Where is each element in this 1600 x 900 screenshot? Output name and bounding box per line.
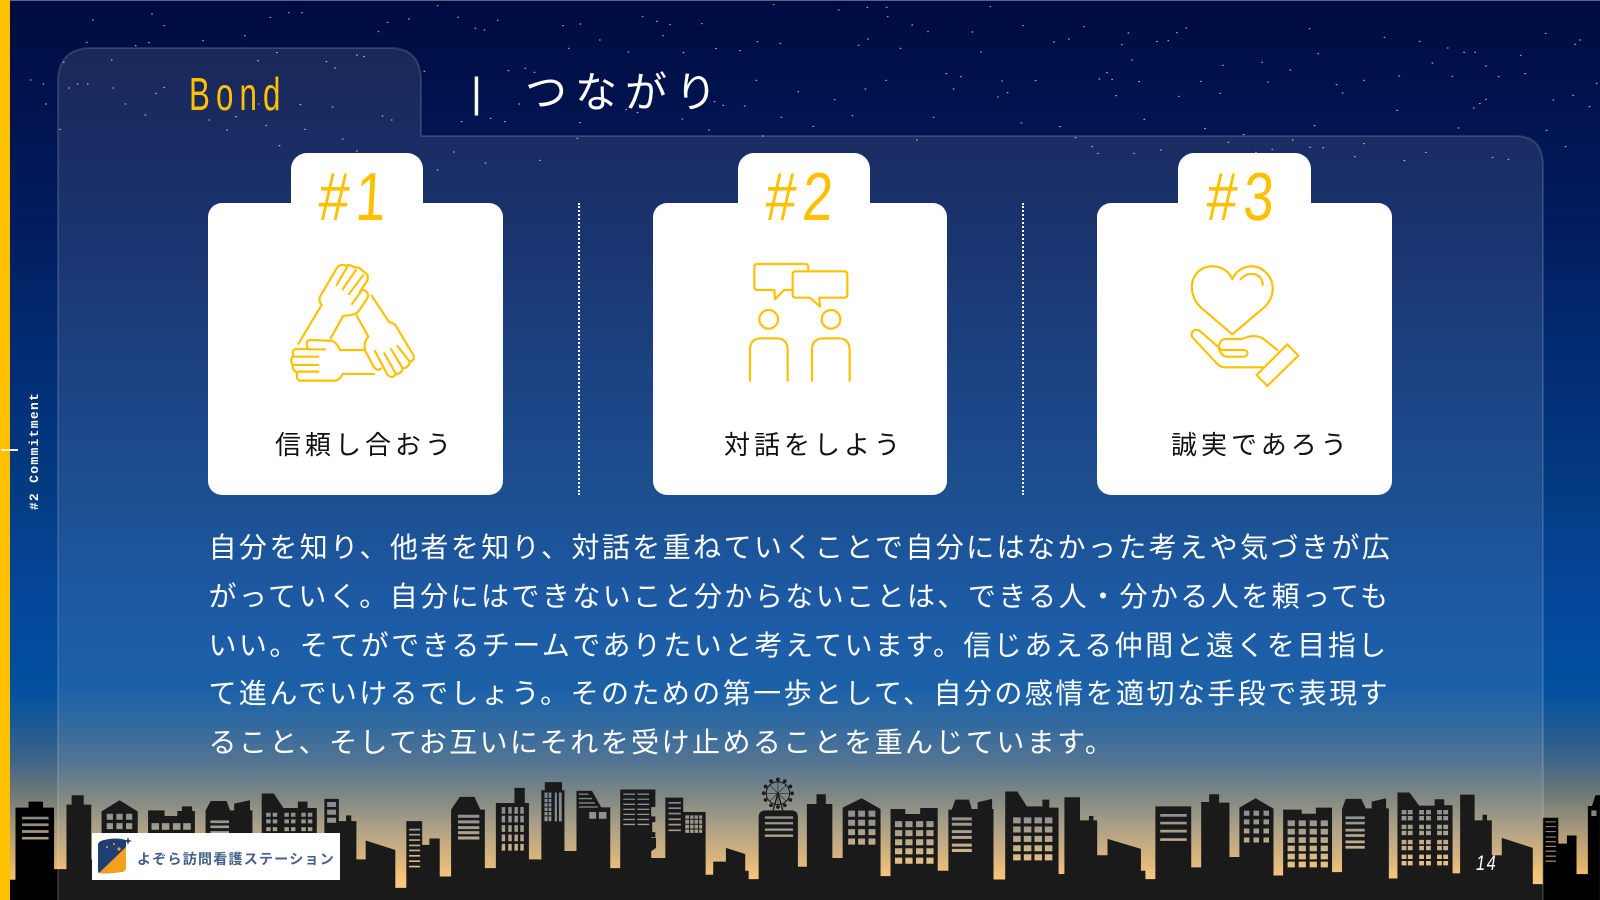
card body 3 xyxy=(1097,203,1392,495)
logo xyxy=(92,833,340,880)
heading: Bond: Bond xyxy=(189,68,287,120)
icon: ferris wheel xyxy=(762,778,794,810)
card label 1: 信頼し合おう xyxy=(275,430,455,460)
vertical section label: #2 Commitment xyxy=(27,392,42,510)
divider 1 xyxy=(578,203,580,495)
number 2: #2 xyxy=(764,159,841,235)
card body 2 xyxy=(653,203,947,495)
card tab 3 xyxy=(1178,153,1311,213)
number 3: #3 xyxy=(1205,159,1282,235)
card tab 1 xyxy=(291,153,423,213)
hand: right xyxy=(357,296,414,377)
panel: card 3 xyxy=(1097,153,1392,495)
accent bar xyxy=(0,0,10,900)
body text: ること、そしてお互いにそれを受け止めることを重んじています。 xyxy=(208,727,1115,758)
panel: card 2 xyxy=(653,153,947,495)
card label 2: 対話をしよう xyxy=(724,430,904,460)
card body 1 xyxy=(208,203,503,495)
card label 3: 誠実であろう xyxy=(1171,430,1351,460)
body text: がっていく。自分にはできないこと分からないことは、できる人・分かる人を頼っても xyxy=(208,581,1391,612)
top edge line xyxy=(10,0,1600,1)
divider 2 xyxy=(1022,203,1024,495)
hand: left xyxy=(291,340,374,381)
skyline silhouette xyxy=(0,778,1600,900)
body text: て進んでいけるでしょう。そのための第一歩として、自分の感情を適切な手段で表現す xyxy=(208,678,1390,709)
body text xyxy=(208,532,1392,758)
logo mark xyxy=(98,837,132,874)
page number: 14 xyxy=(1476,852,1497,875)
panel: card 1 xyxy=(208,153,503,495)
logo text: よぞら訪問看護ステーション xyxy=(137,851,335,867)
number 1: #1 xyxy=(317,159,394,235)
hand: top xyxy=(298,265,368,344)
section tick xyxy=(1,449,18,451)
body text: いい。そてができるチームでありたいと考えています。信じあえる仲間と遠くを目指し xyxy=(208,630,1389,661)
stars xyxy=(31,5,1597,170)
card tab 2 xyxy=(738,153,870,213)
body text: 自分を知り、他者を知り、対話を重ねていくことで自分にはなかった考えや気づきが広 xyxy=(208,532,1392,563)
heading: つながり: | xyxy=(471,69,490,116)
heading: つながり: つながり xyxy=(525,69,725,116)
